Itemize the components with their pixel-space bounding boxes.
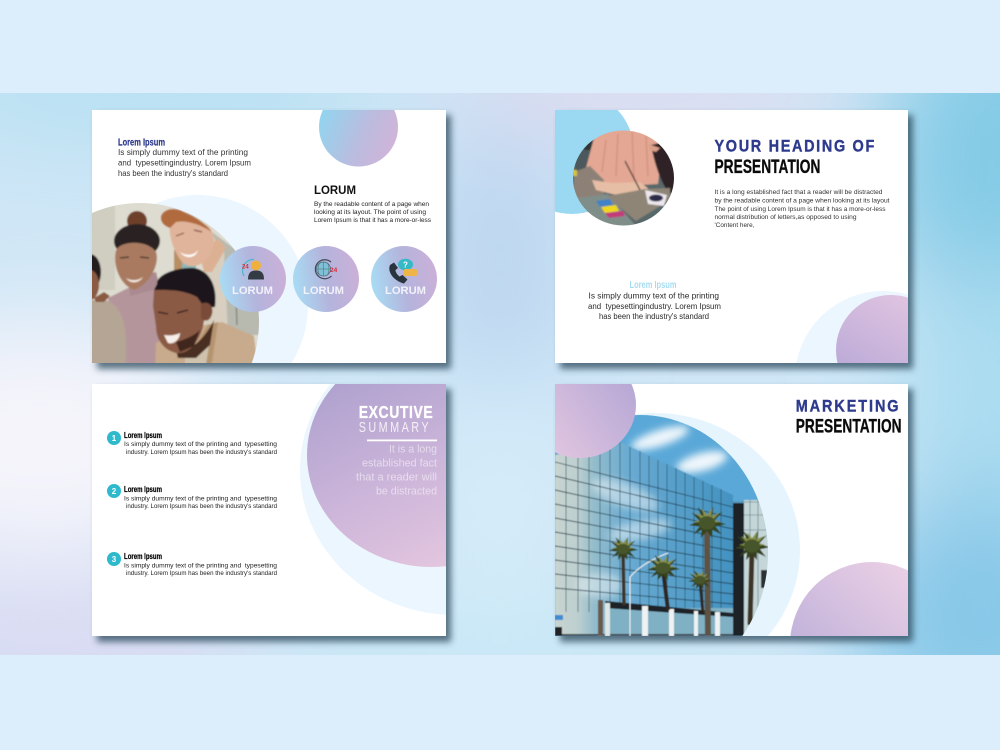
summary text: It is a long	[389, 444, 437, 456]
text block: paragraph: The point of using Lorem Ipsum is that it has a more-or-less	[714, 206, 886, 213]
list item 2: 2	[112, 487, 117, 496]
man at back	[212, 232, 262, 335]
icon: phone and chat: ?	[403, 260, 408, 270]
summary text: that a reader will	[356, 472, 437, 484]
purple circle	[307, 384, 446, 567]
list item 3	[107, 552, 278, 577]
text block: lorem ipsum centred: has been the industry's standard	[599, 312, 709, 321]
list item 3: industry. Lorem Ipsum has been the industry's standard	[126, 570, 278, 577]
purple corner circle	[836, 295, 908, 363]
badge: call: LORUM	[385, 285, 426, 297]
list item 3: 3	[112, 555, 117, 564]
list item 1: Is simply dummy text of the printing and typesetting	[124, 441, 278, 448]
pale background circle	[155, 195, 308, 363]
heading: MARKETING	[796, 398, 899, 416]
panel: slide 2 heading	[555, 110, 908, 363]
slide 4 shadow	[560, 389, 913, 642]
summary text	[356, 444, 437, 498]
top gradient circle	[319, 110, 398, 166]
slide 2 shadow	[560, 115, 913, 369]
text block: paragraph: normal distribution of letters,as opposed to using	[714, 214, 857, 221]
text block: lorem ipsum: and typesettingindustry. Lorem Ipsum	[118, 158, 251, 168]
text block: lorem ipsum centred	[588, 280, 721, 321]
icon: globe 24: 24	[330, 267, 338, 274]
slide 1 shadow	[97, 115, 451, 369]
text block: LORUM paragraph: Lorem Ipsum is that it has a more-or-less	[314, 217, 432, 224]
summary text: established fact	[362, 458, 437, 470]
photo: glass office building with palms	[555, 415, 768, 636]
text block: paragraph	[714, 189, 890, 229]
photo: artist painting	[573, 130, 674, 226]
palm trees	[609, 507, 770, 636]
text block: paragraph: 'Content here,	[714, 222, 755, 229]
heading: PRESENTATION	[714, 156, 820, 178]
text block: lorem ipsum centred: Lorem Ipsum	[630, 280, 677, 291]
list item 1: 1	[112, 434, 117, 443]
left person	[92, 254, 102, 283]
pale circle	[300, 384, 446, 615]
summary text: be distracted	[376, 486, 437, 498]
list item 1: industry. Lorem Ipsum has been the industry's standard	[126, 449, 278, 456]
photo: smiling team	[92, 203, 259, 363]
text block: paragraph: It is a long established fact that a reader will be distracted	[714, 189, 883, 196]
top left purple circle	[555, 384, 636, 458]
badge: support	[220, 246, 286, 312]
ground floor	[605, 608, 733, 636]
clouds	[629, 421, 729, 477]
blue corner circle	[555, 110, 630, 214]
heading	[796, 398, 902, 437]
heading	[714, 137, 875, 178]
front man	[155, 322, 256, 363]
badge: call	[371, 246, 437, 312]
slide 3 shadow	[97, 389, 451, 642]
text block: LORUM paragraph	[314, 185, 432, 224]
panel: slide 3 executive summary	[92, 384, 446, 636]
list item 3: Is simply dummy text of the printing and typesetting	[124, 562, 278, 570]
panel: slide 4 marketing	[555, 384, 908, 636]
text block: LORUM paragraph: looking at its layout. The point of using	[314, 209, 426, 216]
badge: global	[293, 246, 359, 312]
heading: PRESENTATION	[796, 415, 902, 437]
list item 1: Lorem Ipsum	[124, 431, 162, 440]
street lamp	[630, 553, 668, 636]
list item 3: Lorem Ipsum	[124, 552, 162, 561]
text block: LORUM paragraph: LORUM	[314, 185, 356, 197]
pale circle	[635, 413, 800, 636]
heading: YOUR HEADING OF	[714, 137, 875, 156]
list item 2	[107, 484, 278, 510]
text block: lorem ipsum: has been the industry's standard	[118, 169, 228, 178]
summary title	[359, 404, 437, 441]
text block: lorem ipsum: Lorem Ipsum	[118, 138, 165, 148]
badge: global: LORUM	[303, 285, 344, 297]
summary title: EXCUTIVE	[359, 404, 433, 422]
text block: lorem ipsum centred: and typesettingindustry. Lorem Ipsum	[588, 302, 721, 311]
gradient background band	[0, 93, 1000, 655]
text block: lorem ipsum centred: Is simply dummy text of the printing	[588, 292, 719, 300]
text block: lorem ipsum: Is simply dummy text of the printing	[118, 148, 248, 157]
list item 2: Is simply dummy text of the printing and typesetting	[124, 496, 278, 502]
glass facade	[555, 442, 733, 636]
panel: slide 1 team	[92, 110, 446, 363]
bottom right purple circle	[790, 562, 908, 636]
icon: 24 hour support agent: 24	[242, 264, 249, 270]
text block: paragraph: by the readable content of a page when looking at its layout	[714, 198, 890, 204]
list item 2: Lorem Ipsum	[124, 485, 162, 494]
badge: support: LORUM	[232, 285, 273, 297]
text block: LORUM paragraph: By the readable content of a page when	[314, 201, 429, 208]
woman	[107, 287, 160, 363]
list item 2: industry. Lorem Ipsum has been the industry's standard	[126, 503, 278, 510]
summary title: SUMMARY	[359, 418, 429, 435]
text block: lorem ipsum	[118, 138, 251, 178]
list item 1	[107, 431, 278, 456]
pale corner circle	[796, 291, 908, 363]
neighbouring building	[733, 503, 744, 636]
